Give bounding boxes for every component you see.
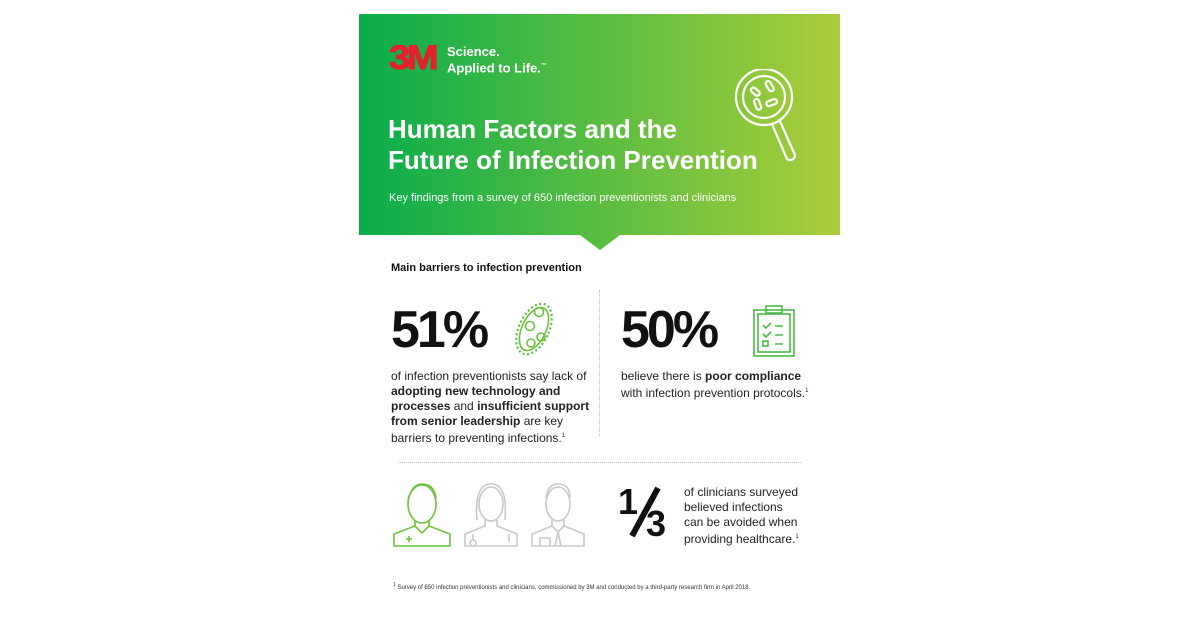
text block: believe there is poor compliance with infection prevention protocols.1 — [621, 369, 808, 400]
header panel — [359, 14, 840, 250]
icons: people — [393, 483, 585, 547]
text block: of infection preventionists say lack of adopting new technology and processes and insufficient support from senior leadership are key barriers to preventing infections.1 — [391, 369, 589, 445]
title — [388, 114, 758, 175]
text block: of clinicians surveyed believed infections can be avoided when providing healthcare.1 — [684, 485, 799, 546]
stat: one third — [618, 484, 666, 540]
logo: Applied to Life.™ — [447, 60, 547, 75]
stat: 50% — [621, 301, 808, 400]
title: Future of Infection Prevention — [388, 145, 758, 175]
stat: 51%: 51% — [391, 301, 486, 359]
stat: 51% — [391, 301, 589, 445]
subtitle: Key findings from a survey of 650 infection preventionists and clinicians — [389, 192, 736, 204]
title: Human Factors and the — [388, 114, 677, 144]
section heading: Main barriers to infection prevention — [391, 262, 582, 274]
icon: germ — [515, 302, 553, 356]
stat: 50%: 50% — [621, 301, 716, 359]
icon: magnifier — [734, 69, 796, 162]
logo: 3M — [389, 39, 435, 77]
logo: Science. — [447, 44, 500, 59]
icon: clipboard — [753, 305, 795, 357]
footnote: 1 Survey of 650 infection preventionists and clinicians, commissioned by 3M and conducted by a third-party research firm in April 2018. — [393, 582, 750, 591]
logo — [389, 39, 547, 77]
